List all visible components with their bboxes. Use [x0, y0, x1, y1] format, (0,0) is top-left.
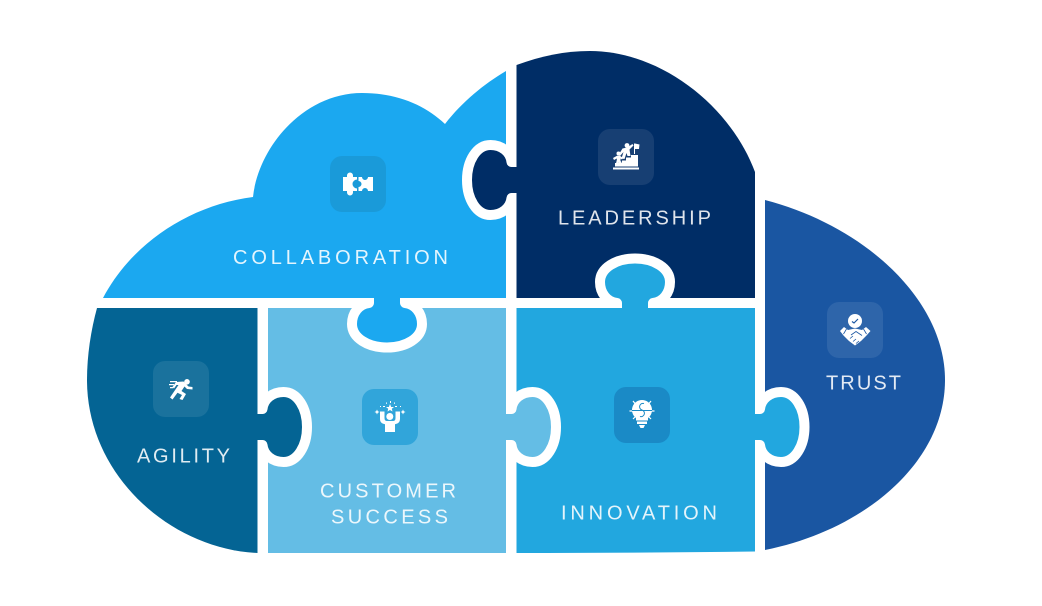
icon: person with raised arms and star: [362, 389, 418, 445]
panel: leadership: [516, 51, 755, 298]
heading: customer success: CUSTOMER: [320, 480, 456, 502]
puzzle tab: customer success into innovation: [506, 392, 556, 462]
icon: climbing stairs with flag: [598, 129, 654, 185]
heading: collaboration: COLLABORATION: [233, 247, 448, 269]
puzzle tab: agility into customer success: [256, 392, 307, 462]
icon: light bulb: [614, 387, 670, 443]
panel: customer success: SUCCESS: [331, 506, 448, 528]
panel: innovation: [516, 308, 755, 553]
panel: trust: [765, 200, 945, 550]
puzzle tab: innovation into leadership: [600, 258, 670, 309]
heading: innovation: INNOVATION: [561, 502, 717, 524]
heading: leadership: LEADERSHIP: [558, 208, 711, 230]
puzzle tab: collaboration into customer success: [352, 297, 422, 348]
panel: agility: [87, 308, 258, 553]
icon: running figure: [153, 361, 209, 417]
panel: collaboration: [103, 71, 506, 298]
heading: agility: AGILITY: [137, 446, 230, 468]
icon: handshake with check: [827, 302, 883, 358]
puzzle tab: leadership into collaboration: [467, 145, 518, 215]
panel: customer success: [268, 308, 506, 553]
puzzle tab: innovation into trust: [754, 392, 804, 462]
icon: puzzle pieces: [330, 156, 386, 212]
heading: trust: TRUST: [826, 372, 901, 394]
